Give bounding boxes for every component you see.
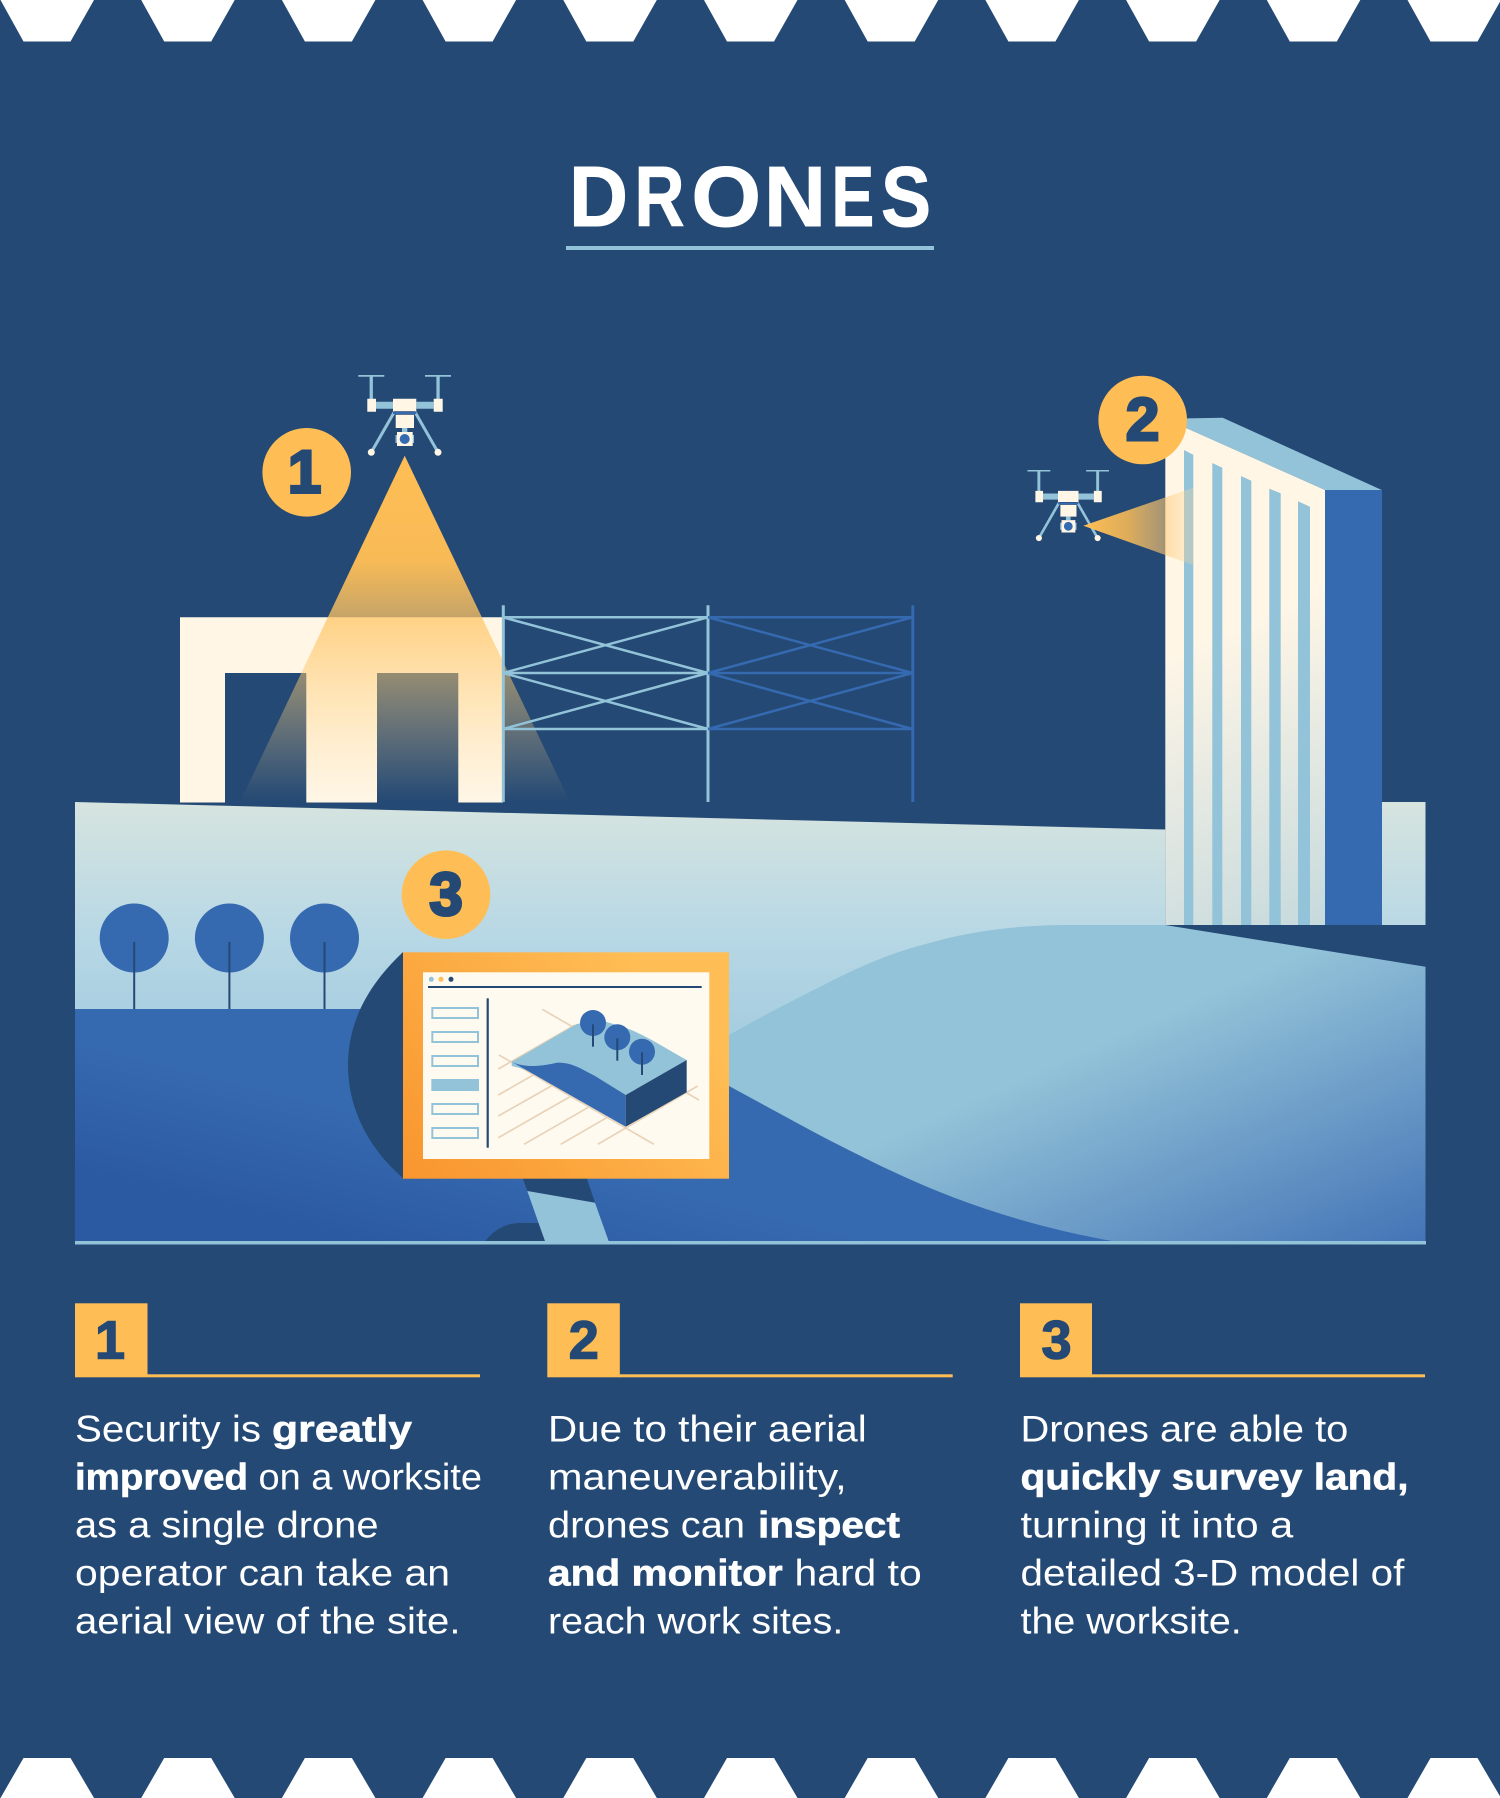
baseline xyxy=(75,1241,1426,1244)
window top line xyxy=(428,986,702,988)
ground: light land xyxy=(75,802,1165,1120)
tower stripes xyxy=(1184,450,1310,925)
model top surface xyxy=(512,1020,687,1095)
text block 1: improved xyxy=(75,1457,248,1498)
text block 1 xyxy=(75,1409,482,1641)
site grid lines xyxy=(498,1009,699,1144)
light cone from drone 1 xyxy=(240,456,570,802)
number box 3 xyxy=(1020,1303,1425,1377)
text block 1: as a single drone xyxy=(75,1504,378,1546)
scaffold: dark section xyxy=(708,605,913,802)
text block 2: reach work sites. xyxy=(548,1600,843,1641)
building under construction xyxy=(180,617,503,802)
model trees xyxy=(580,1010,655,1075)
light cone from drone 2 xyxy=(1083,488,1193,565)
monitor stand light xyxy=(527,1191,609,1241)
badge 2 xyxy=(1098,376,1187,464)
monitor stand dark xyxy=(523,1178,595,1203)
model front face xyxy=(512,1062,626,1127)
title: R xyxy=(634,150,684,245)
monitor frame xyxy=(403,952,729,1179)
illustration xyxy=(75,375,1426,1244)
text block 2: drones can xyxy=(548,1504,745,1546)
dark mound xyxy=(485,1223,545,1241)
tree 3 xyxy=(290,904,359,1009)
badge 2: 2 xyxy=(1126,386,1159,453)
badge 3: 3 xyxy=(429,861,463,928)
sidebar menu xyxy=(431,1008,479,1138)
text block 3 xyxy=(1020,1409,1408,1641)
column 2 xyxy=(547,1303,953,1641)
text block 2: maneuverability, xyxy=(548,1457,847,1498)
window dots xyxy=(429,977,454,982)
number box 2: 2 xyxy=(569,1310,599,1370)
tree 1 xyxy=(100,904,169,1009)
ground: right segment xyxy=(1382,802,1426,925)
column 1 xyxy=(75,1303,482,1641)
number box 2 xyxy=(547,1303,953,1377)
model side face xyxy=(626,1060,687,1127)
title: O xyxy=(691,150,761,245)
badge 1 xyxy=(262,428,351,517)
tower front xyxy=(1165,419,1325,925)
tree 2 xyxy=(195,904,264,1009)
top zigzag border xyxy=(0,0,1500,42)
dark curve behind monitor xyxy=(348,952,403,1178)
trees row xyxy=(100,904,359,1009)
text block 2: inspect xyxy=(758,1504,900,1546)
title: S xyxy=(881,150,931,245)
bottom zigzag border xyxy=(0,1758,1500,1798)
column 3 xyxy=(1020,1303,1425,1641)
scaffolding xyxy=(503,605,913,802)
title: E xyxy=(832,150,874,245)
text block 1: greatly xyxy=(272,1409,412,1450)
hill xyxy=(729,925,1426,1242)
text block 3: the worksite. xyxy=(1020,1600,1242,1641)
monitor screen xyxy=(423,972,709,1159)
drone 2 xyxy=(1027,470,1109,541)
title: N xyxy=(764,150,826,245)
monitor xyxy=(403,952,729,1179)
text block 2: hard to xyxy=(794,1552,922,1593)
text block 3: detailed 3-D model of xyxy=(1020,1552,1405,1593)
badge 3 xyxy=(402,850,490,939)
3-D model xyxy=(512,1020,687,1127)
drone 1 xyxy=(358,375,451,456)
title: D xyxy=(569,150,628,245)
title underline xyxy=(566,246,934,250)
text block 3: Drones are able to xyxy=(1020,1409,1348,1450)
text block 3: quickly survey land, xyxy=(1020,1457,1408,1498)
text block 2: Due to their aerial xyxy=(548,1409,867,1450)
text block 1: aerial view of the site. xyxy=(75,1600,460,1641)
scaffold: light section xyxy=(503,605,708,802)
tower roof xyxy=(1165,418,1382,490)
text block 3: turning it into a xyxy=(1020,1504,1294,1546)
text block 1: on a worksite xyxy=(258,1457,482,1498)
text block 2 xyxy=(548,1409,922,1641)
number box 1 xyxy=(75,1303,480,1377)
text block 1: Security is xyxy=(75,1409,261,1450)
water: blue area xyxy=(75,1009,1118,1242)
sidebar divider xyxy=(487,998,489,1148)
badge 1: 1 xyxy=(288,438,321,506)
tower side xyxy=(1325,490,1382,925)
number box 3: 3 xyxy=(1041,1310,1072,1370)
tower xyxy=(1165,418,1382,925)
text block 1: operator can take an xyxy=(75,1552,450,1593)
text block 2: and monitor xyxy=(548,1552,783,1593)
number box 1: 1 xyxy=(95,1310,125,1370)
